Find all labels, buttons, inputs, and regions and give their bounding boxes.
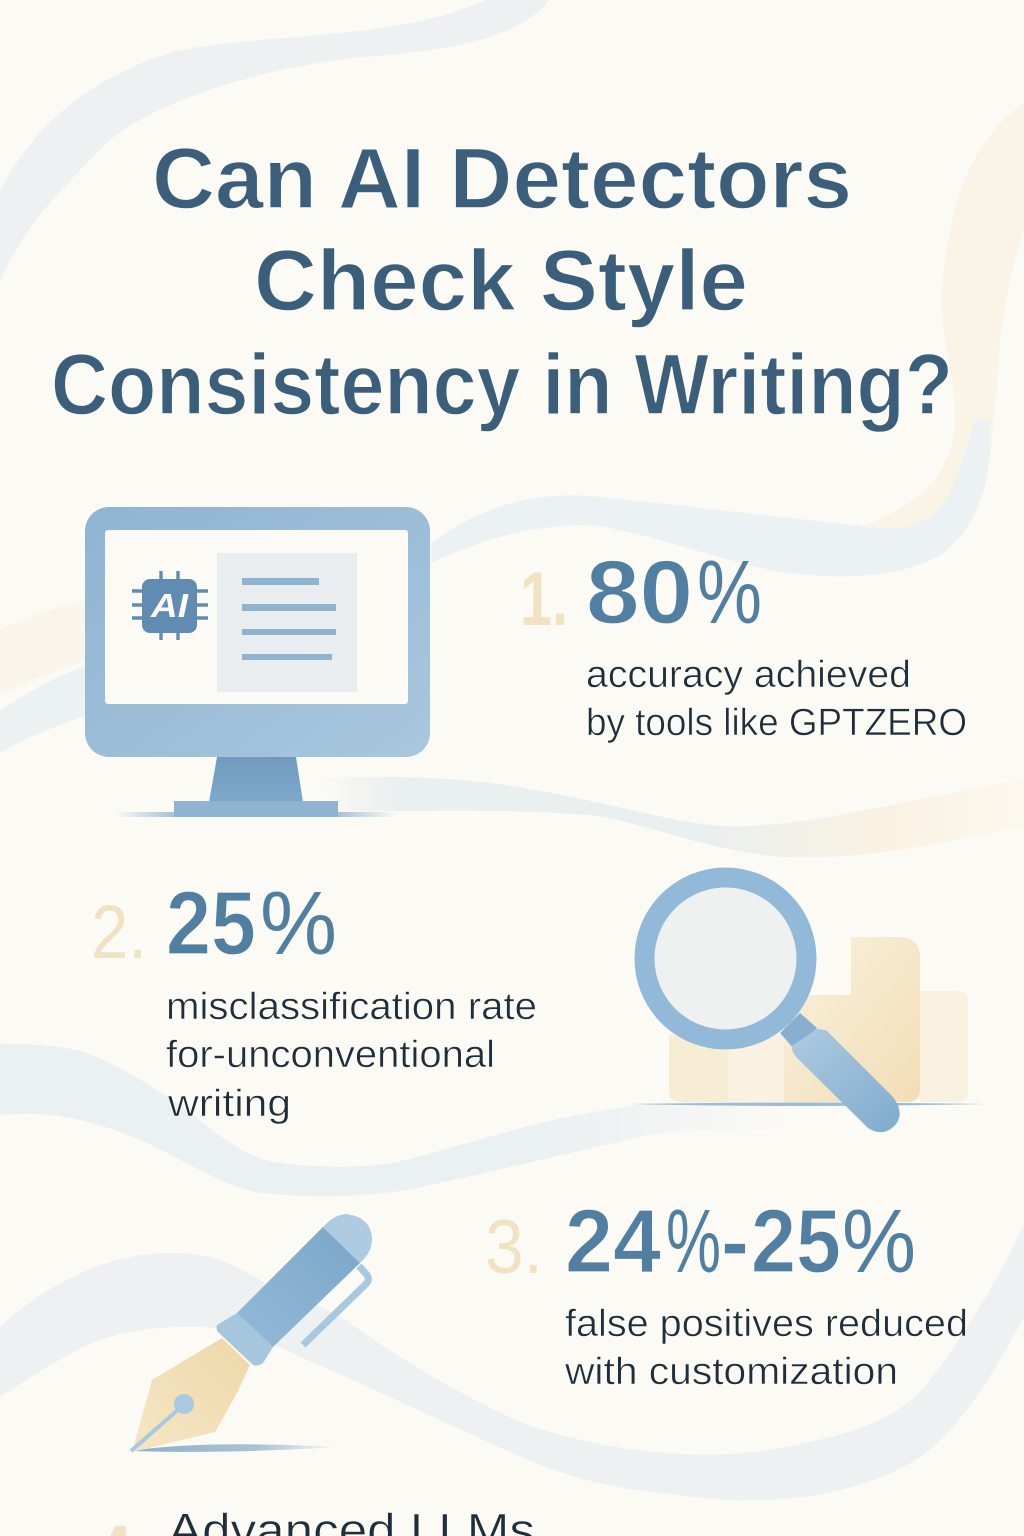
- stat 3: 24%-25% false positives: [485, 1192, 968, 1393]
- stat 1: 80% accuracy: accuracy achieved: [586, 654, 911, 696]
- stat 1: 80% accuracy: by tools like GPTZERO: [586, 702, 967, 744]
- title: Can AI Detectors: [152, 131, 852, 227]
- title: Consistency in Writing?: [51, 337, 953, 433]
- stat 3: 24%-25% false positives: false positives reduced: [565, 1303, 968, 1345]
- stat 2: 25% misclassification: %: [260, 874, 337, 974]
- stat 2: 25% misclassification: for-unconventional: [166, 1034, 495, 1076]
- icon: AI chip: AI: [150, 587, 189, 624]
- stat 2: 25% misclassification: misclassification rate: [166, 986, 537, 1028]
- stat 1: 80% accuracy: [520, 543, 967, 744]
- icon: AI chip: [132, 571, 208, 640]
- icon: computer monitor with AI chip: [85, 507, 430, 817]
- stat 3: 24%-25% false positives: 24: [565, 1192, 661, 1292]
- stat 3: 24%-25% false positives: 25: [751, 1192, 841, 1292]
- stat 3: 24%-25% false positives: with customization: [564, 1351, 898, 1393]
- stat 2: 25% misclassification: 25: [166, 874, 256, 974]
- stat 2: 25% misclassification: 2.: [91, 890, 147, 975]
- stat 1: 80% accuracy: 80: [586, 543, 693, 643]
- stat 3: 24%-25% false positives: 3.: [485, 1205, 543, 1290]
- stat 1: 80% accuracy: 1.: [520, 557, 568, 642]
- icon: fountain pen: [131, 1214, 372, 1452]
- icon: magnifying glass over bar chart: [630, 878, 985, 1132]
- title: [51, 131, 953, 433]
- stat 3: 24%-25% false positives: %: [842, 1192, 916, 1292]
- stat 3: 24%-25% false positives: -: [721, 1192, 749, 1292]
- stat 2: 25% misclassification: [91, 874, 537, 1125]
- title: Check Style: [254, 233, 748, 329]
- stat 1: 80% accuracy: %: [697, 543, 762, 643]
- stat 2: 25% misclassification: writing: [167, 1083, 291, 1125]
- stat 3: 24%-25% false positives: %: [666, 1192, 721, 1292]
